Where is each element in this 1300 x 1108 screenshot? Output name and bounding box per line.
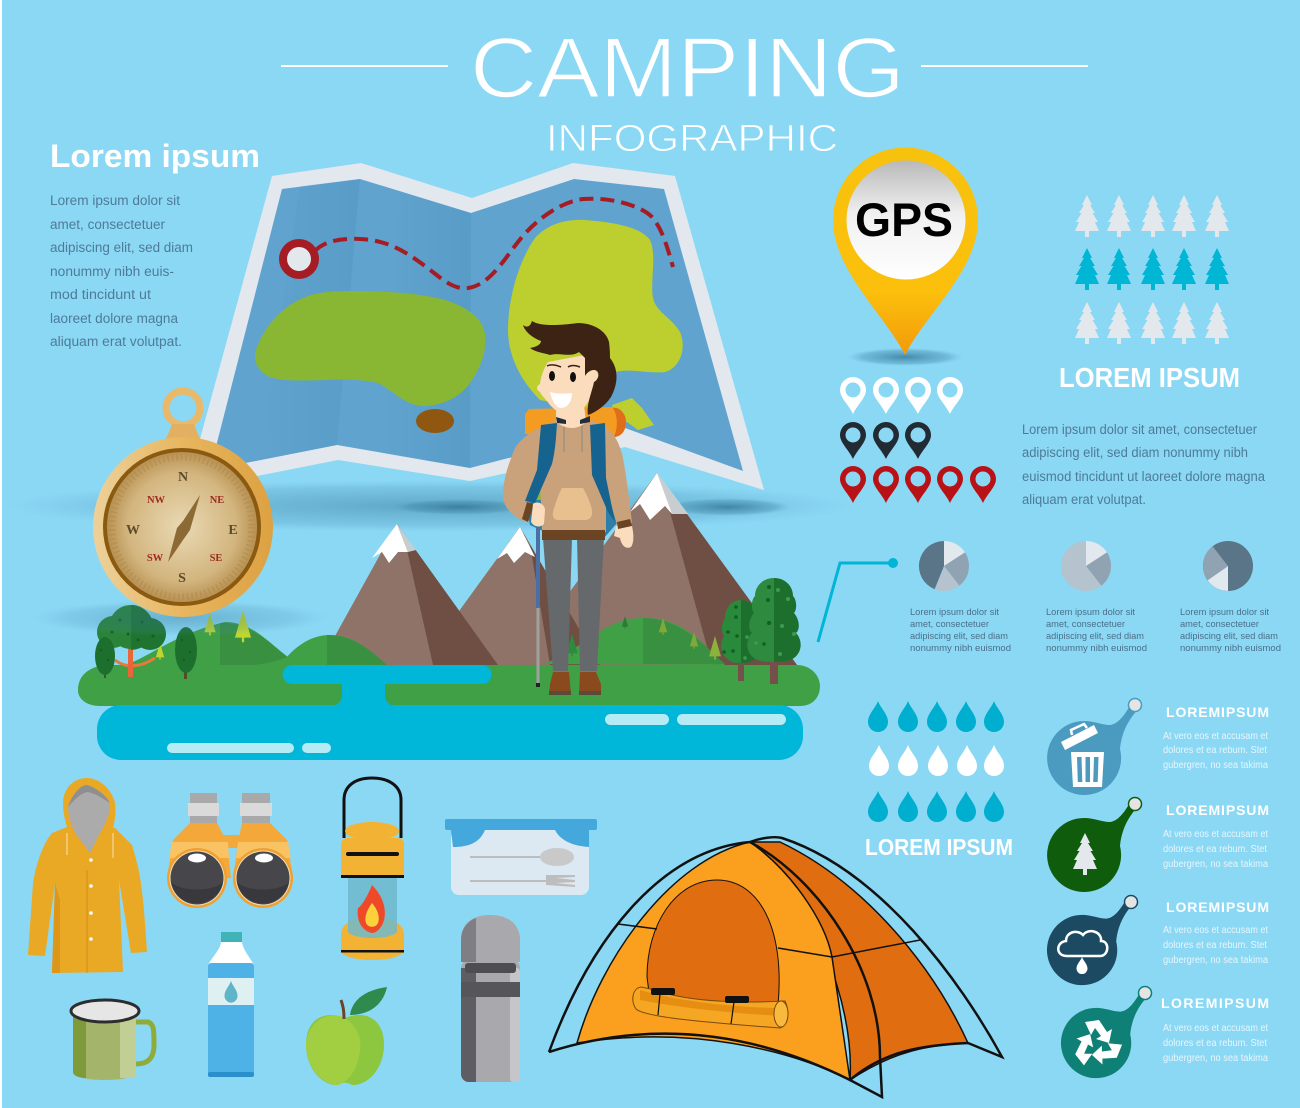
landscape [78, 473, 820, 760]
bubble [1047, 897, 1134, 985]
gripping hand [531, 503, 545, 526]
icon: apple [306, 987, 387, 1085]
text block: trees paragraph: adipiscing elit, sed diam nonummy nibh [1022, 445, 1248, 460]
bubble dot [1128, 798, 1142, 810]
route start marker [279, 239, 319, 279]
backpack end [613, 408, 626, 437]
route dashes [315, 199, 673, 288]
rain item text [1163, 925, 1268, 966]
compass intercardinal letters: SW [147, 553, 164, 564]
heading: lorem ipsum drops: LOREM IPSUM [865, 834, 1013, 860]
compass cardinal letters: S [178, 571, 186, 586]
backpack straps [525, 423, 615, 522]
trekking pole [536, 527, 540, 687]
icon: thermos [461, 915, 520, 1082]
white pins [840, 377, 963, 414]
river channel [282, 665, 492, 684]
bubble dot [1124, 896, 1138, 908]
pie caption 1 [910, 607, 1011, 654]
pie chart 2 [1061, 541, 1111, 591]
tent seams [618, 924, 920, 957]
tent [549, 837, 1002, 1097]
ground [78, 665, 820, 706]
compass cardinal letters: E [228, 523, 238, 538]
torso [538, 420, 606, 532]
mountain 1 [319, 524, 498, 665]
title rule right [921, 65, 1088, 67]
right island [508, 220, 683, 410]
intro paragraph: laoreet dolore magna [50, 311, 178, 326]
compass intercardinal letters [147, 495, 224, 564]
pie caption 3: adipiscing elit, sed diam [1180, 631, 1278, 642]
hair [523, 321, 617, 415]
tree group left [95, 605, 197, 679]
forest item text: dolores et ea rebum. Stet [1163, 844, 1267, 855]
forest item text [1163, 829, 1268, 870]
icon: raincoat [28, 778, 147, 973]
rain item text: gubergren, no sea takima [1163, 955, 1268, 966]
right hill [543, 618, 725, 665]
pie caption 1: Lorem ipsum dolor sit [910, 607, 999, 618]
compass intercardinal letters: NW [147, 495, 166, 506]
small island [612, 398, 654, 430]
bubble [1047, 799, 1139, 892]
icon: food box [445, 819, 597, 895]
bubble dot [1138, 986, 1152, 1000]
mountain 2 [420, 527, 600, 665]
forest item text: At vero eos et accusam et [1163, 829, 1268, 840]
tent side [750, 842, 968, 1080]
icon: water bottle [208, 932, 254, 1077]
sleeping mat roll [633, 987, 788, 1028]
trash item text: At vero eos et accusam et [1163, 731, 1268, 742]
recycle item text [1163, 1023, 1268, 1064]
compass intercardinal letters: NE [210, 495, 224, 506]
left wristband [522, 502, 534, 522]
compass ring [166, 391, 200, 425]
pocket [553, 488, 592, 520]
small yellow trees [156, 610, 721, 660]
tree row 3 [1075, 302, 1229, 344]
pie caption 3: nonummy nibh euismod [1180, 643, 1281, 654]
neck [556, 405, 586, 428]
eyes [549, 371, 576, 382]
right hill shade [643, 618, 725, 664]
intro paragraph: mod tincidunt ut [50, 287, 151, 302]
hood strings [564, 425, 582, 452]
icon: trash can [1061, 724, 1104, 787]
pie caption 2: Lorem ipsum dolor sit [1046, 607, 1135, 618]
tree pictogram [1075, 195, 1229, 344]
rain item text: At vero eos et accusam et [1163, 925, 1268, 936]
trash item text: dolores et ea rebum. Stet [1163, 745, 1267, 756]
drop row 1 [868, 701, 1004, 732]
compass ticks [112, 457, 252, 597]
channel underlay [325, 684, 400, 707]
text block: trees paragraph: euismod tincidunt ut laoreet dolore magna [1022, 469, 1265, 484]
right wristband [617, 519, 632, 529]
pie chart 1 [919, 541, 969, 591]
middle hill [280, 635, 388, 670]
gps label: GPS [855, 193, 953, 246]
rain item title: LOREMIPSUM [1166, 899, 1269, 915]
left hill shade [220, 623, 287, 667]
bubble item: forest [1047, 798, 1269, 892]
tent front [577, 842, 850, 1080]
pie chart 3 [1203, 541, 1253, 591]
pie caption 2: nonummy nibh euismod [1046, 643, 1147, 654]
callout connector [818, 558, 898, 642]
bubble dot [1128, 698, 1142, 712]
eyebrows [547, 365, 580, 367]
compass cardinal letters: N [178, 470, 188, 485]
icon: binoculars [167, 793, 293, 908]
drop row 3 [868, 791, 1004, 822]
bubble item: trash [1047, 698, 1269, 795]
gps marker [833, 148, 978, 366]
red pins [840, 466, 996, 503]
title text: camping: CAMPING [470, 21, 905, 116]
intro paragraph [50, 193, 193, 349]
map fold shading 2 [385, 192, 471, 468]
trash item title: LOREMIPSUM [1166, 704, 1269, 720]
icon: cloud and drop [1058, 931, 1107, 974]
brown island [416, 409, 454, 433]
icon: recycle arrows [1069, 1020, 1124, 1069]
forest item text: gubergren, no sea takima [1163, 859, 1268, 870]
map paper border [186, 163, 764, 490]
tree row 2 [1075, 248, 1229, 290]
tree group right [721, 578, 801, 684]
forest item title: LOREMIPSUM [1166, 802, 1269, 818]
title rule left [281, 65, 448, 67]
bubble item: recycle [1061, 986, 1269, 1078]
compass cardinal letters [126, 470, 238, 586]
left island [255, 291, 485, 406]
gps pin body [833, 148, 978, 355]
intro paragraph: nonummy nibh euis- [50, 264, 174, 279]
face [537, 355, 598, 414]
title [281, 21, 1088, 160]
text block: trees paragraph [1022, 422, 1265, 507]
tree row 1 [1075, 195, 1229, 237]
pie caption 3: Lorem ipsum dolor sit [1180, 607, 1269, 618]
compass cardinal letters: W [126, 523, 140, 538]
small location pins [840, 377, 996, 503]
hood collar [556, 416, 590, 424]
right arm [604, 426, 632, 525]
intro paragraph: Lorem ipsum dolor sit [50, 193, 180, 208]
hiker [503, 321, 633, 695]
compass neck [165, 424, 201, 440]
subtitle: infographic: INFOGRAPHIC [546, 118, 838, 160]
compass case [93, 437, 273, 617]
left arm [503, 428, 540, 522]
gps pin shadow [847, 348, 963, 366]
compass [93, 391, 273, 617]
tent door [647, 880, 779, 1005]
text block: trees paragraph: Lorem ipsum dolor sit amet, consectetuer [1022, 422, 1257, 437]
black pins [840, 422, 931, 459]
right leg [577, 538, 604, 671]
pie caption 2: adipiscing elit, sed diam [1046, 631, 1144, 642]
bubble item: rain [1047, 896, 1269, 985]
recycle item text: gubergren, no sea takima [1163, 1053, 1268, 1064]
compass shadow [30, 600, 330, 636]
trash item text [1163, 731, 1268, 771]
gps pin face [846, 160, 966, 280]
water drop pictogram [868, 701, 1004, 822]
middle hill shade [327, 635, 388, 666]
map sea [210, 179, 743, 471]
recycle item title: LOREMIPSUM [1161, 995, 1269, 1011]
bubble [1047, 702, 1139, 795]
belt [542, 530, 605, 540]
bubble [1061, 990, 1148, 1078]
right hand [614, 526, 633, 548]
recycle item text: At vero eos et accusam et [1163, 1023, 1268, 1034]
compass bezel [105, 450, 259, 604]
pie caption 3: amet, consectetuer [1180, 619, 1259, 630]
intro paragraph: adipiscing elit, sed diam [50, 240, 193, 255]
icon: mug [71, 1000, 154, 1080]
pie caption 3 [1180, 607, 1281, 654]
compass needle [168, 495, 200, 562]
intro paragraph: aliquam erat volutpat. [50, 334, 182, 349]
icon: tree [1073, 833, 1097, 875]
text block: trees paragraph: aliquam erat volutpat. [1022, 492, 1146, 507]
trash item text: gubergren, no sea takima [1163, 760, 1268, 771]
drop row 2 [869, 745, 1004, 776]
map fold shading [260, 179, 360, 460]
heading: lorem ipsum trees: LOREM IPSUM [1059, 362, 1240, 393]
left leg [543, 538, 572, 671]
backpack lower [525, 500, 618, 538]
map [186, 163, 764, 490]
pie caption 2 [1046, 607, 1147, 654]
recycle item text: dolores et ea rebum. Stet [1163, 1038, 1267, 1049]
text block: intro [50, 138, 260, 349]
rain item text: dolores et ea rebum. Stet [1163, 940, 1267, 951]
intro paragraph: amet, consectetuer [50, 217, 166, 232]
heading: lorem ipsum: Lorem ipsum [50, 138, 260, 174]
boots [549, 672, 601, 695]
tent frame [549, 837, 1002, 1097]
left hill [78, 622, 310, 700]
compass intercardinal letters: SE [210, 553, 222, 564]
smile [550, 392, 572, 408]
icon: lantern [341, 778, 404, 960]
lake [97, 705, 803, 760]
backpack [525, 407, 626, 437]
ground shadow [0, 480, 860, 532]
mountain 3 [516, 473, 797, 665]
pie caption 1: nonummy nibh euismod [910, 643, 1011, 654]
pie caption 2: amet, consectetuer [1046, 619, 1125, 630]
map green sliver [528, 468, 545, 500]
pie caption 1: adipiscing elit, sed diam [910, 631, 1008, 642]
pie caption 1: amet, consectetuer [910, 619, 989, 630]
lake highlights [167, 714, 786, 753]
